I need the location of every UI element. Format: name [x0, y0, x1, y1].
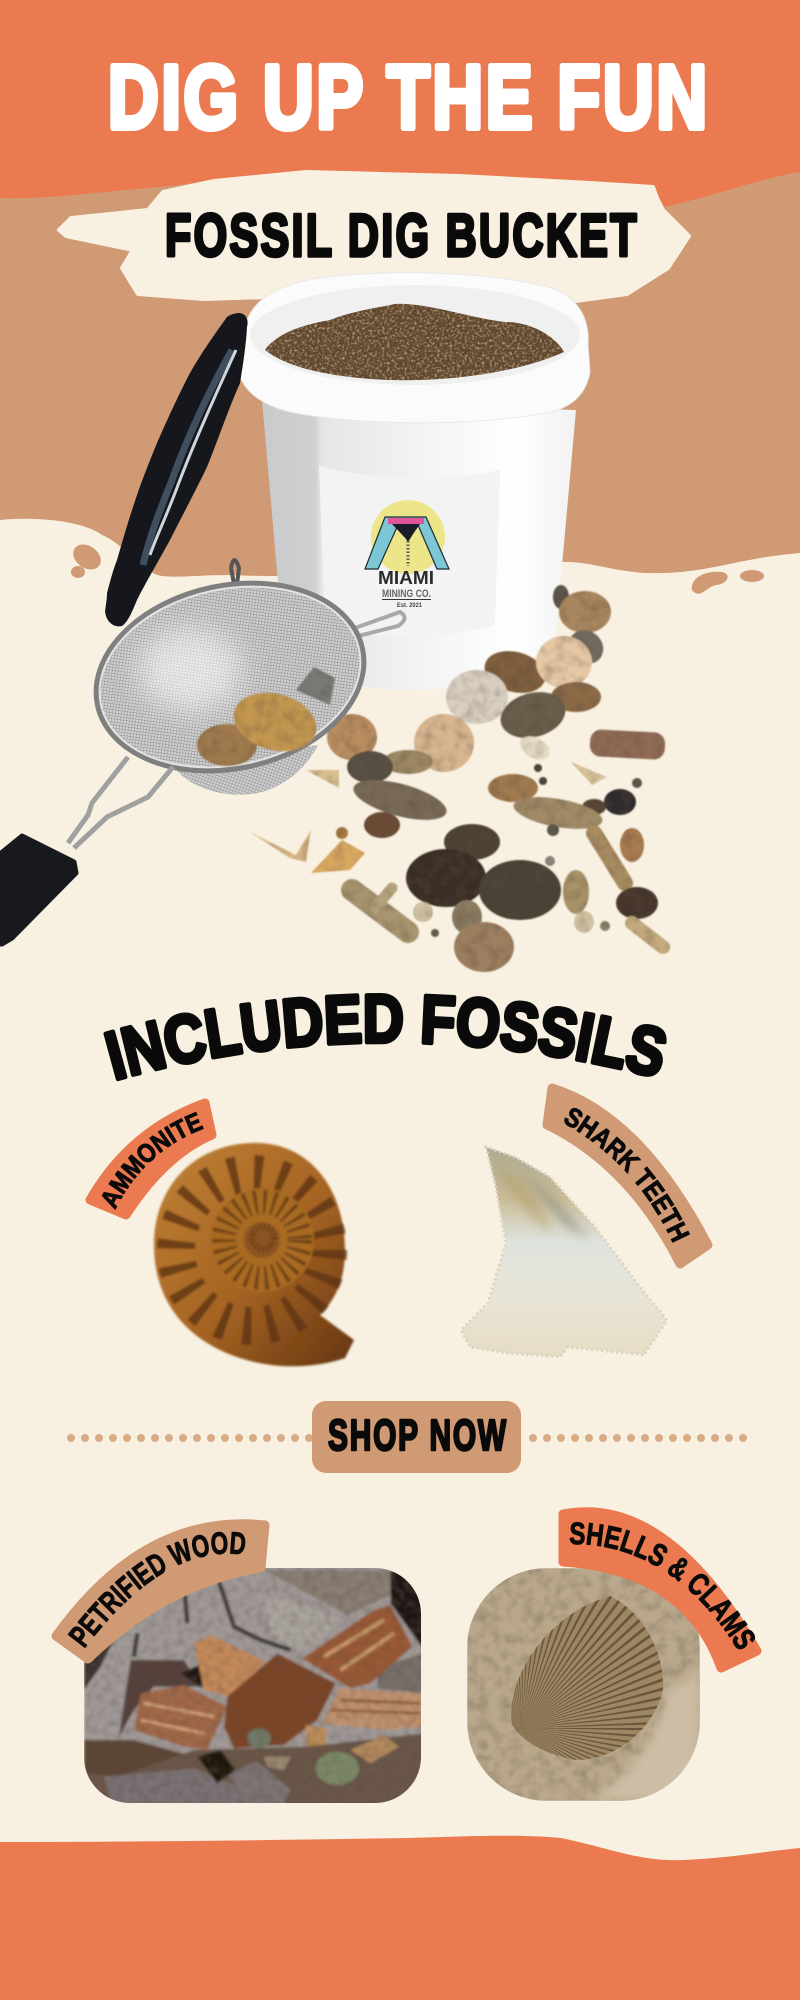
shop now button: SHOP NOW — [328, 1410, 507, 1459]
shells and clams label: SHELLS & CLAMS — [570, 1522, 756, 1650]
bucket label sticker — [319, 466, 500, 637]
dotted divider left — [71, 1434, 311, 1442]
included fossils heading: INCLUDED FOSSILS — [104, 993, 667, 1082]
petrified wood photo — [84, 1560, 424, 1810]
strainer — [0, 560, 405, 944]
shark teeth label: SHARK TEETH — [564, 1108, 690, 1243]
title: DIG UP THE FUN — [108, 48, 707, 148]
shell fossil photo — [467, 1568, 700, 1801]
ammonite fossil — [154, 1143, 354, 1366]
bucket opening — [250, 285, 580, 385]
tan hero band — [0, 160, 800, 577]
soil — [265, 304, 564, 380]
bucket — [238, 273, 590, 690]
petrified wood label: PETRIFIED WOOD — [68, 1532, 246, 1648]
decorative blobs right — [692, 570, 764, 594]
strainer mesh and rim — [79, 560, 381, 794]
orange header shape — [0, 0, 800, 207]
logo — [365, 500, 449, 609]
shark tooth fossil — [461, 1147, 667, 1357]
logo: Est. 2021 — [397, 603, 423, 609]
bucket lid — [105, 313, 248, 626]
subtitle: FOSSIL DIG BUCKET — [165, 203, 637, 270]
shark teeth label — [542, 1084, 712, 1268]
bucket rim — [238, 273, 590, 423]
logo: MIAMI — [378, 568, 434, 588]
strainer mesh highlight — [138, 628, 242, 712]
strainer side hook — [355, 612, 405, 636]
ammonite label: AMMONITE — [102, 1112, 204, 1210]
decorative blobs left — [68, 539, 106, 578]
scattered fossils pile — [250, 585, 666, 972]
logo: MINING CO. — [382, 588, 431, 600]
brush stroke banner — [59, 172, 689, 303]
orange footer shape — [0, 1836, 800, 2000]
strainer black grip — [0, 836, 76, 944]
strainer wire handle — [68, 757, 173, 848]
dotted divider right — [533, 1434, 746, 1442]
shop now button — [312, 1401, 521, 1473]
bucket body — [262, 400, 576, 690]
strainer hanger loop — [231, 560, 239, 584]
stones in strainer — [197, 667, 335, 766]
strainer basket underside — [172, 745, 318, 795]
strainer rim highlight — [83, 563, 377, 791]
